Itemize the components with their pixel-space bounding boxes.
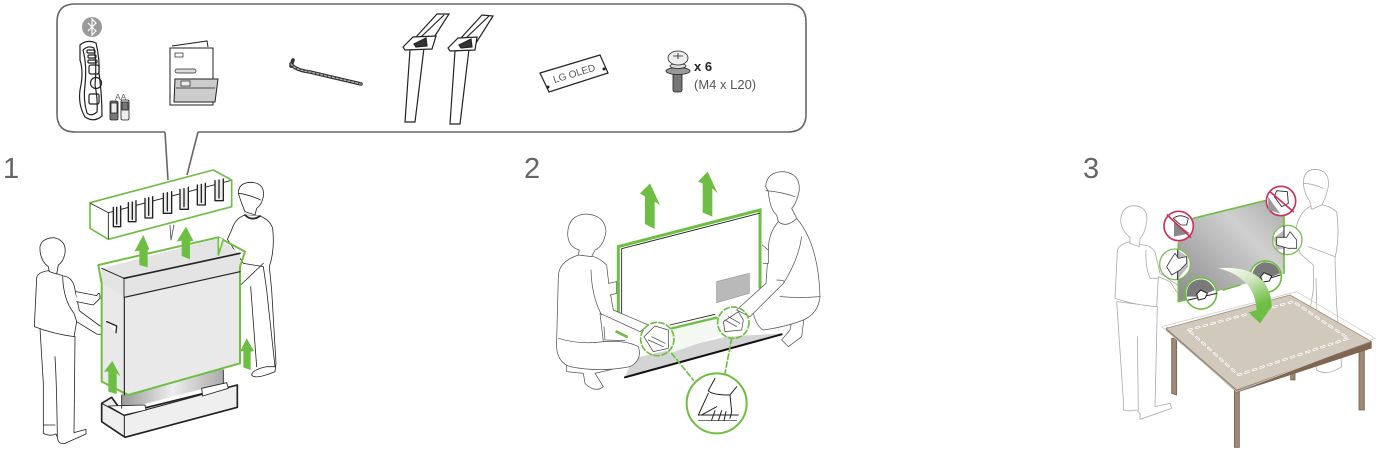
safe grip bottom right bbox=[1250, 261, 1281, 292]
safe grip right side bbox=[1273, 225, 1302, 255]
person: left bbox=[34, 238, 117, 444]
TV panel bbox=[604, 210, 762, 341]
step number 3: 3 bbox=[1083, 153, 1099, 185]
illustration: step 3 placing TV on table bbox=[1115, 169, 1375, 447]
icon: owner's manual bbox=[170, 41, 218, 105]
box: bottom tray bbox=[102, 368, 237, 437]
label: screw count: x 6 bbox=[694, 59, 712, 74]
table bbox=[1162, 292, 1375, 447]
illustration: step 1 lifting box bbox=[34, 170, 276, 444]
base: packaging tray bbox=[625, 315, 782, 377]
icon: remote control bbox=[80, 41, 102, 120]
detail circles bbox=[641, 307, 749, 380]
icon: AA batteries: AA bbox=[115, 92, 127, 102]
person: right crouching bbox=[737, 172, 820, 347]
callout: package contents bbox=[57, 4, 806, 180]
icon: stand right bbox=[448, 15, 493, 124]
insert: top foam bbox=[90, 170, 232, 239]
hands on tray bbox=[644, 312, 743, 352]
inset: hand detail bbox=[687, 373, 747, 433]
person: left crouching bbox=[556, 214, 648, 389]
arrows: lift up bbox=[640, 172, 718, 229]
box: outer sleeve bbox=[98, 237, 245, 395]
safe grip bottom left bbox=[1185, 278, 1217, 309]
arrows: lift up bbox=[104, 227, 254, 394]
icon: LG OLED badge: LG OLED bbox=[552, 63, 597, 86]
icon: cable management strap bbox=[291, 60, 361, 84]
step number 2: 2 bbox=[524, 153, 540, 185]
icon: AA batteries bbox=[110, 92, 129, 120]
icon: LG OLED badge bbox=[540, 55, 608, 92]
illustration: step 2 lifting TV bbox=[556, 172, 820, 433]
icon: screw bbox=[666, 51, 690, 92]
person: right bbox=[227, 182, 276, 377]
prohibited grip left bbox=[1164, 211, 1193, 241]
hand on box bbox=[107, 322, 117, 333]
step number 1: 1 bbox=[3, 153, 19, 185]
person: left standing bbox=[1115, 206, 1185, 419]
icon: bluetooth badge bbox=[82, 17, 102, 37]
arrow: lower onto table bbox=[1218, 268, 1272, 323]
label: screw size: (M4 x L20) bbox=[694, 77, 756, 92]
safe grip left side bbox=[1160, 249, 1190, 280]
tail of the callout bbox=[170, 225, 174, 240]
TV panel bbox=[1178, 197, 1284, 302]
prohibited grip right bbox=[1266, 186, 1296, 216]
person: right standing bbox=[1295, 169, 1342, 373]
icon: stand left bbox=[403, 14, 449, 122]
